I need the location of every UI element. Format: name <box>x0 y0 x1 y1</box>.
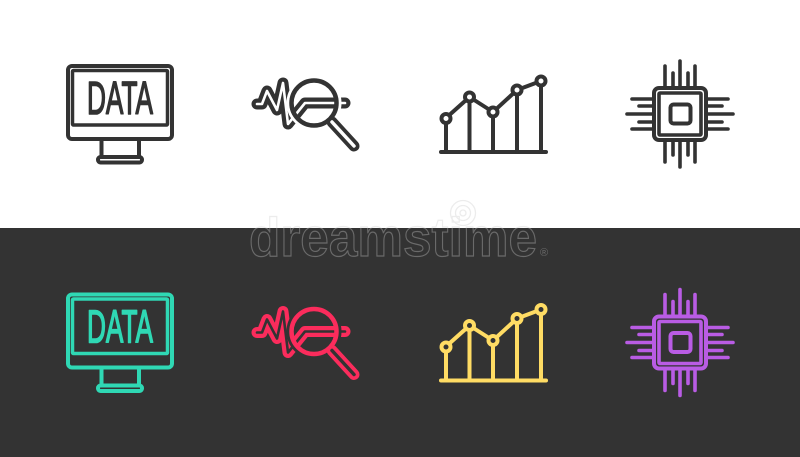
watermark: dreamstime <box>249 206 537 268</box>
watermark: dreamstime <box>249 206 537 268</box>
icon: data monitor, teal: DATA <box>87 300 153 352</box>
icon: wave under magnifier, dark <box>257 77 354 146</box>
watermark: ® <box>540 247 548 259</box>
icon: wave under magnifier, red <box>257 306 354 374</box>
panel: dark bottom band <box>0 228 800 457</box>
panel: white top band <box>0 0 800 228</box>
icon: data monitor, teal <box>68 294 172 391</box>
icon: microchip, dark <box>627 61 733 167</box>
icon: line chart, yellow <box>441 305 546 380</box>
icon: line chart, dark <box>441 76 546 152</box>
icon: data monitor, dark: DATA <box>87 72 153 124</box>
icon: data monitor, dark <box>68 66 172 162</box>
icon: microchip, purple <box>627 290 733 396</box>
